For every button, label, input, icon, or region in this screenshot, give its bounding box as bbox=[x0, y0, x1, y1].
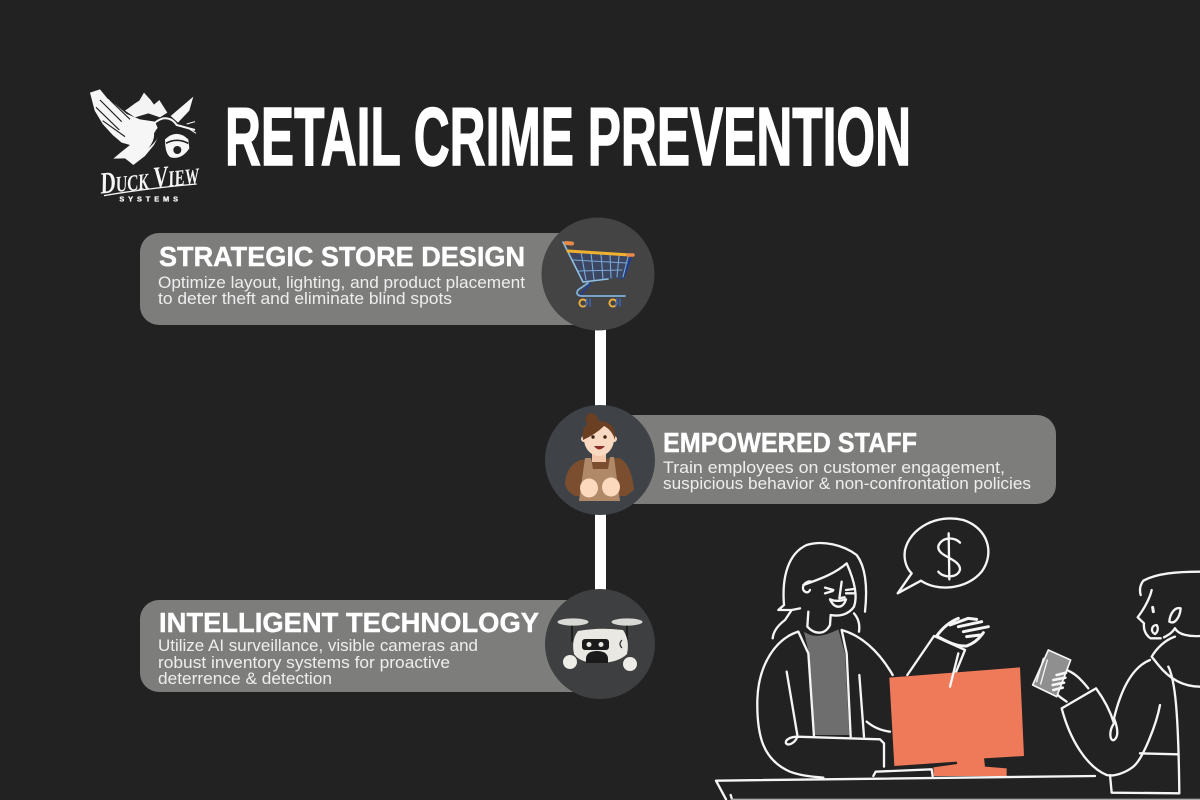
icon: shopping cart bbox=[542, 218, 654, 330]
icon: robot drone bbox=[545, 589, 655, 699]
description: Optimize layout, lighting, and product placement bbox=[158, 274, 525, 292]
counter bbox=[716, 776, 1095, 799]
panel: strategic store design bbox=[140, 233, 610, 325]
keyboard bbox=[873, 769, 933, 776]
description: Train employees on customer engagement, bbox=[663, 459, 1005, 477]
speech bubble with dollar sign bbox=[898, 518, 988, 593]
heading: INTELLIGENT TECHNOLOGY bbox=[159, 607, 539, 638]
customer figure bbox=[1053, 572, 1200, 793]
icon: staff member bbox=[545, 405, 655, 515]
illustration: cashier and customer at counter bbox=[716, 518, 1200, 800]
logo: Duck View Systems bbox=[90, 89, 202, 203]
description: deterrence & detection bbox=[158, 670, 332, 688]
icon: duck with camera bbox=[90, 89, 196, 165]
computer monitor bbox=[889, 653, 1024, 776]
logo subtitle: SYSTEMS bbox=[119, 194, 178, 203]
description: Utilize AI surveillance, visible cameras and bbox=[158, 637, 478, 655]
cashier figure bbox=[757, 543, 988, 778]
description: suspicious behavior & non-confrontation policies bbox=[663, 475, 1031, 493]
heading: EMPOWERED STAFF bbox=[663, 427, 917, 458]
heading: STRATEGIC STORE DESIGN bbox=[159, 241, 525, 272]
panel background bbox=[590, 415, 1056, 504]
icon: mountains bbox=[125, 93, 167, 117]
description: to deter theft and eliminate blind spots bbox=[158, 290, 452, 308]
description: robust inventory systems for proactive bbox=[158, 654, 450, 672]
icon: payment card bbox=[1033, 650, 1071, 697]
cashier shirt bbox=[804, 629, 849, 735]
panel background bbox=[140, 600, 610, 692]
panel background bbox=[140, 233, 610, 325]
timeline connector bbox=[595, 325, 606, 591]
panel: empowered staff bbox=[590, 415, 1056, 504]
panel: intelligent technology bbox=[140, 600, 610, 692]
logo wordmark: DUCK VIEW bbox=[97, 156, 202, 201]
